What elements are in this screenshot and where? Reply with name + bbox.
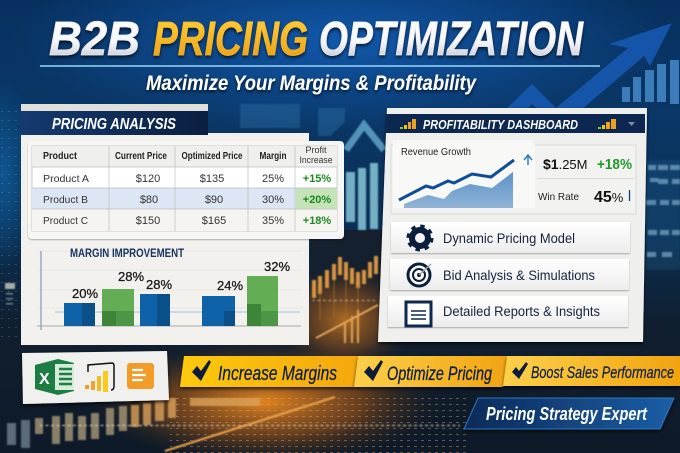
bar chart: margin improvement: 32% bbox=[264, 259, 290, 274]
revenue growth card bbox=[391, 140, 636, 214]
title: B2B bbox=[49, 13, 140, 66]
bar chart: margin improvement: 24% bbox=[217, 278, 243, 293]
benefit badges bbox=[180, 356, 680, 387]
stats: revenue and win rate: Win Rate bbox=[538, 191, 579, 203]
icon: excel bbox=[35, 359, 74, 395]
pricing table card: Increase bbox=[300, 155, 332, 165]
badge: optimize pricing: Optimize Pricing bbox=[387, 364, 492, 385]
badge: boost sales performance bbox=[503, 356, 680, 386]
title: OPTIMIZATION bbox=[319, 13, 584, 66]
pricing table card: Current Price bbox=[115, 151, 167, 162]
pricing table card: Product B bbox=[43, 194, 88, 206]
bar chart: margin improvement: 28% bbox=[146, 277, 172, 292]
icon: excel: X bbox=[39, 371, 50, 388]
left-edge marks bbox=[5, 283, 15, 289]
pricing analysis heading: PRICING ANALYSIS bbox=[52, 116, 177, 133]
subtitle: Maximize Your Margins & Profitability bbox=[146, 72, 477, 95]
bar chart: margin improvement: MARGIN IMPROVEMENT bbox=[70, 248, 184, 260]
title bbox=[49, 13, 584, 66]
button: bid analysis and simulations bbox=[390, 259, 629, 290]
icon: power bi bbox=[85, 363, 114, 392]
pricing table card: $150 bbox=[136, 215, 160, 227]
pricing table card: +15% bbox=[303, 173, 331, 185]
title: PRICING bbox=[153, 13, 308, 66]
pricing table card: +18% bbox=[303, 215, 331, 227]
revenue growth card: Revenue Growth bbox=[401, 147, 471, 158]
stats: revenue and win rate: $1.25M bbox=[543, 156, 587, 172]
expert banner bbox=[464, 398, 674, 429]
pricing table card: Product C bbox=[43, 215, 88, 227]
button: dynamic pricing model: Dynamic Pricing Model bbox=[443, 230, 575, 246]
button: bid analysis and simulations: Bid Analysis & Simulations bbox=[443, 267, 595, 283]
stats: revenue and win rate: +18% bbox=[597, 156, 632, 173]
bar chart: margin improvement bbox=[36, 248, 302, 330]
pricing table card: Product bbox=[43, 151, 78, 162]
pricing table card: $135 bbox=[200, 173, 224, 185]
bar chart: margin improvement: 28% bbox=[118, 269, 144, 284]
faint background blocks top bbox=[240, 104, 345, 136]
tools card bbox=[22, 351, 169, 404]
button: detailed reports and insights: Detailed Reports & Insights bbox=[443, 303, 600, 319]
pricing table card: $165 bbox=[202, 215, 226, 227]
pricing table card: $90 bbox=[205, 194, 223, 206]
pricing table card: Profit bbox=[305, 145, 327, 155]
panel: pricing analysis bbox=[21, 104, 344, 345]
right-edge data bars bbox=[646, 165, 680, 257]
pricing table card: Optimized Price bbox=[182, 151, 243, 162]
pricing analysis heading bbox=[21, 111, 208, 135]
pricing table card: 35% bbox=[262, 215, 284, 227]
pricing table card: Margin bbox=[260, 151, 286, 162]
badge: optimize pricing bbox=[354, 356, 507, 387]
button: detailed reports and insights bbox=[388, 296, 628, 327]
icon: slides bbox=[127, 363, 154, 389]
pricing table card: 30% bbox=[262, 194, 284, 206]
chart arrow graphic bbox=[503, 23, 679, 128]
badge: increase margins bbox=[180, 356, 358, 387]
dashboard header bbox=[386, 114, 645, 133]
stats: revenue and win rate bbox=[537, 156, 634, 206]
mid-column chart graphics bbox=[346, 163, 378, 230]
button: dynamic pricing model bbox=[391, 222, 630, 253]
pricing table card bbox=[28, 141, 344, 239]
pricing table card: Product A bbox=[43, 173, 89, 185]
badge: increase margins: Increase Margins bbox=[218, 363, 337, 385]
expert banner: Pricing Strategy Expert bbox=[486, 404, 648, 424]
pricing table card: $120 bbox=[136, 173, 160, 185]
pricing table card: $80 bbox=[140, 194, 158, 206]
pricing table card: +20% bbox=[303, 194, 331, 206]
panel: profitability dashboard bbox=[378, 108, 647, 342]
dashboard header: PROFITABILITY DASHBOARD bbox=[423, 118, 578, 132]
stats: revenue and win rate: 45% bbox=[594, 189, 624, 206]
pricing table card: 25% bbox=[262, 173, 284, 185]
bar chart: margin improvement: 20% bbox=[72, 286, 98, 301]
